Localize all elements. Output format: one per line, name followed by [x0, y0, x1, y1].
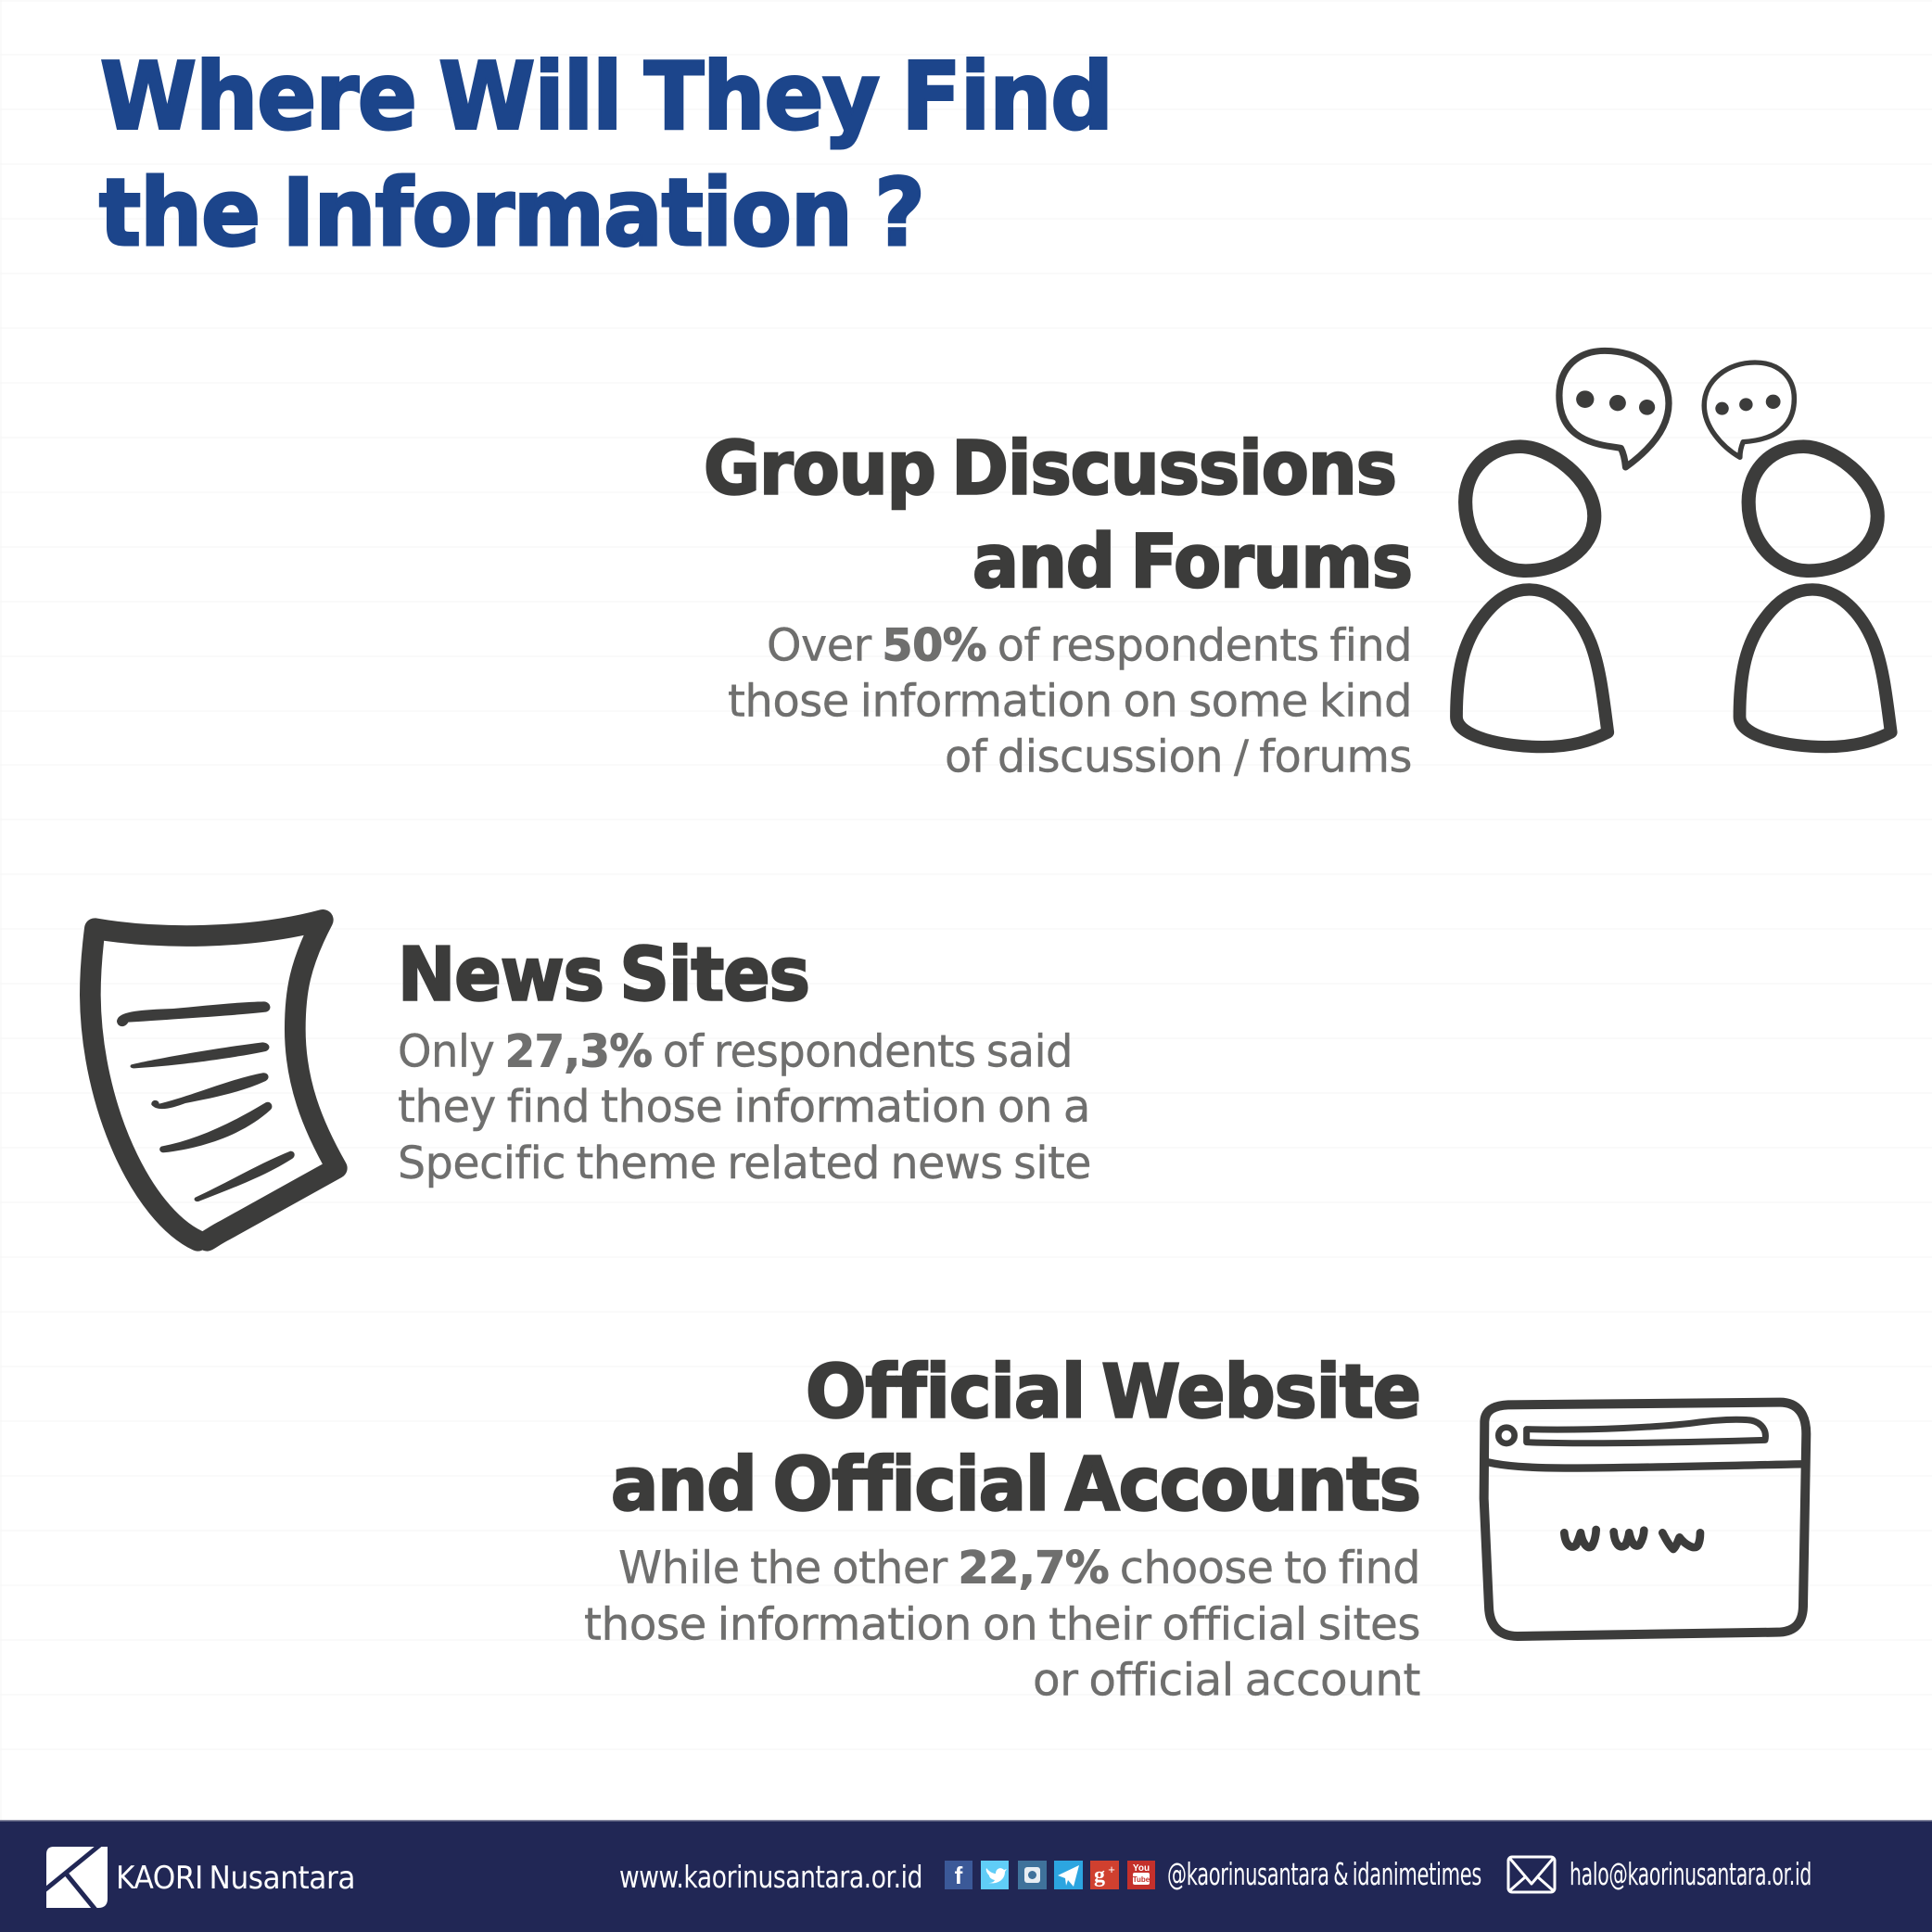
- icon: facebook: f: [955, 1862, 963, 1889]
- icon: facebook: [945, 1861, 972, 1889]
- icon: left person: [1456, 447, 1608, 747]
- text: group discussions description: Over 50% of respondents find: [767, 619, 1412, 671]
- text: group discussions description: those information on some kind: [728, 675, 1412, 727]
- icon: right person: [1739, 447, 1891, 747]
- text: news sites description: Specific theme related news site: [398, 1138, 1091, 1189]
- icon: news page: [90, 920, 337, 1240]
- text: official website description: or official account: [1033, 1654, 1420, 1706]
- organisation name: KAORI Nusantara: [116, 1860, 355, 1897]
- title: Where Will They Find: [100, 43, 1112, 150]
- heading: official website: Official Website: [806, 1350, 1420, 1435]
- heading: group discussions: [704, 426, 1412, 604]
- footer bar: [0, 1820, 1932, 1932]
- icon: telegram: [1054, 1861, 1083, 1889]
- icon: youtube: You: [1133, 1863, 1150, 1874]
- social handles: @kaorinusantara & idanimetimes: [1167, 1856, 1481, 1892]
- heading: group discussions: Group Discussions: [704, 426, 1396, 512]
- text: group discussions description: [728, 619, 1412, 782]
- text: official website description: those information on their official sites: [584, 1598, 1420, 1650]
- icon: twitter: [981, 1861, 1009, 1889]
- heading: official website: [611, 1350, 1420, 1528]
- panel: group discussions: [704, 350, 1891, 782]
- icon: browser window: [1484, 1403, 1806, 1636]
- heading: official website: and Official Accounts: [611, 1443, 1420, 1528]
- icon: google plus: [1090, 1861, 1119, 1889]
- heading: group discussions: and Forums: [972, 519, 1412, 604]
- panel: news sites: [90, 920, 1091, 1240]
- icon: right speech bubble: [1704, 362, 1794, 457]
- text: news sites description: they find those information on a: [398, 1081, 1090, 1133]
- text: official website description: While the other 22,7% choose to find: [618, 1543, 1420, 1595]
- icon: left speech bubble: [1559, 350, 1669, 467]
- logo: [44, 1845, 108, 1910]
- text: official website description: [584, 1543, 1420, 1706]
- text: news sites description: Only 27,3% of respondents said: [398, 1025, 1073, 1077]
- social icons: [945, 1861, 1155, 1889]
- heading: news sites: News Sites: [398, 933, 809, 1018]
- website url: www.kaorinusantara.or.id: [619, 1859, 922, 1895]
- icon: youtube: [1127, 1861, 1155, 1889]
- text: news sites description: [398, 1025, 1091, 1189]
- icon: envelope: [1508, 1857, 1555, 1892]
- panel: official website: [584, 1350, 1806, 1706]
- title: the Information ?: [99, 159, 924, 267]
- icon: google plus: g: [1094, 1863, 1105, 1888]
- icon: youtube: Tube: [1133, 1875, 1150, 1884]
- title: [99, 43, 1112, 267]
- text: group discussions description: of discussion / forums: [945, 731, 1412, 782]
- icon: google plus: +: [1108, 1862, 1115, 1876]
- icon: instagram: [1018, 1861, 1047, 1889]
- icon: two people talking: [1456, 350, 1891, 747]
